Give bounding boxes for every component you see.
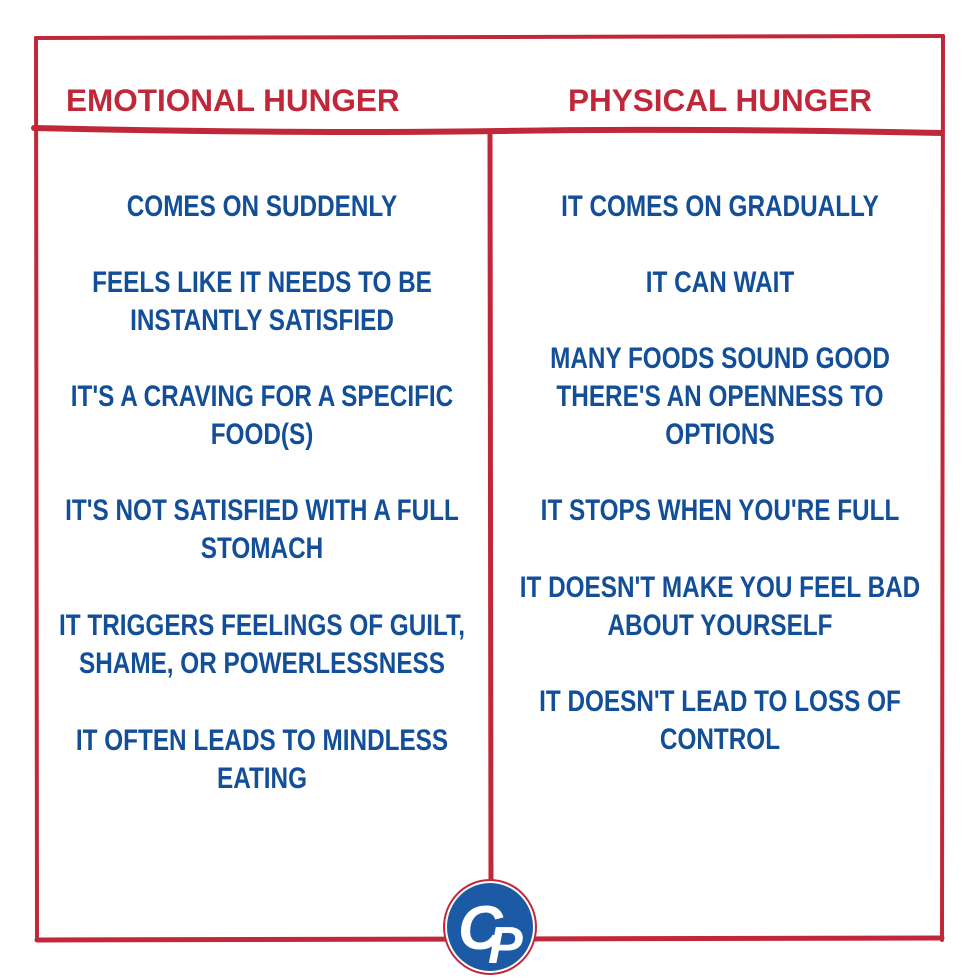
text: physical 3: MANY FOODS SOUND GOOD: [550, 342, 890, 375]
text: emotional 3: FOOD(S): [211, 418, 313, 451]
text: emotional 5: IT TRIGGERS FEELINGS OF GUILT,: [59, 609, 465, 642]
heading: emotional hunger: EMOTIONAL HUNGER: [66, 82, 400, 118]
text: physical 3: THERE'S AN OPENNESS TO: [556, 380, 884, 413]
text: emotional 5: [59, 609, 465, 680]
text: physical 6: IT DOESN'T LEAD TO LOSS OF: [539, 685, 901, 718]
icon: CP logo: C: [458, 894, 504, 963]
text: emotional 3: [71, 380, 453, 451]
text: emotional 2: FEELS LIKE IT NEEDS TO BE: [92, 266, 432, 299]
icon: CP logo: P: [488, 917, 523, 975]
text: physical 6: [539, 685, 901, 756]
text: physical 5: IT DOESN'T MAKE YOU FEEL BAD: [520, 571, 920, 604]
text: physical 5: [520, 571, 920, 642]
text: physical 1: IT COMES ON GRADUALLY: [561, 190, 879, 223]
text: emotional 2: INSTANTLY SATISFIED: [130, 304, 394, 337]
text: emotional 4: STOMACH: [201, 532, 323, 565]
text: physical 3: OPTIONS: [665, 418, 775, 451]
text: physical 5: ABOUT YOURSELF: [607, 609, 833, 642]
text: emotional 6: EATING: [217, 762, 307, 795]
text: emotional 6: [76, 724, 448, 795]
text: physical 3: [550, 342, 890, 451]
text: emotional 4: [65, 494, 459, 565]
text: physical 6: CONTROL: [660, 723, 780, 756]
text: emotional 1: COMES ON SUDDENLY: [127, 190, 397, 223]
text: physical 2: IT CAN WAIT: [646, 266, 794, 299]
heading: physical hunger: PHYSICAL HUNGER: [568, 82, 872, 118]
text: emotional 6: IT OFTEN LEADS TO MINDLESS: [76, 724, 448, 757]
text: emotional 5: SHAME, OR POWERLESSNESS: [79, 647, 445, 680]
text: emotional 3: IT'S A CRAVING FOR A SPECIFIC: [71, 380, 453, 413]
text: physical 4: IT STOPS WHEN YOU'RE FULL: [541, 494, 899, 527]
text: emotional 2: [92, 266, 432, 337]
text: emotional 4: IT'S NOT SATISFIED WITH A FULL: [65, 494, 459, 527]
icon: CP logo: [443, 879, 537, 975]
